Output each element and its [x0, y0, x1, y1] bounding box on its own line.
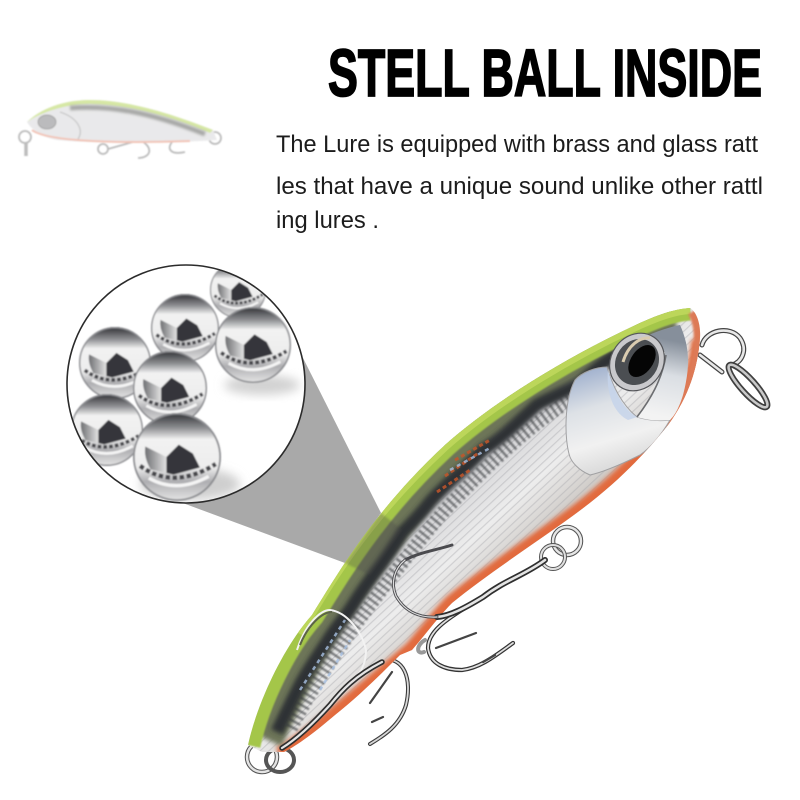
rear hook shank — [282, 662, 382, 748]
upper belly hook — [393, 545, 452, 617]
hook eye rings — [553, 527, 581, 555]
thumbnail body — [27, 100, 217, 143]
rear treble hook and rings (behind body) — [247, 659, 408, 772]
lure eye — [598, 323, 676, 401]
iris sheen — [623, 338, 650, 362]
rear hook curve — [370, 659, 408, 744]
gill edge — [637, 355, 666, 417]
belly hook shank — [437, 560, 545, 617]
magnifier cone — [180, 358, 381, 563]
eyelet — [700, 331, 744, 372]
description text: The Lure is equipped with brass and glass ratt — [276, 131, 758, 158]
snout shading — [664, 312, 698, 432]
thumbnail orange belly — [32, 130, 190, 142]
lens background — [67, 265, 305, 503]
front eyelet and split ring — [700, 331, 772, 411]
hooks over the body — [282, 545, 545, 748]
snout plate — [638, 325, 688, 420]
rear joint segment — [297, 610, 366, 683]
steel ball cluster — [71, 262, 300, 501]
silver base — [240, 300, 710, 760]
thumbnail green back — [27, 100, 213, 133]
iridescent flecks — [437, 440, 490, 492]
iridescent cheek — [608, 370, 637, 420]
light green highlight — [300, 310, 690, 634]
thumbnail gill — [60, 112, 80, 139]
rear rings — [247, 742, 277, 772]
gill plate — [566, 367, 670, 475]
thumbnail eye — [38, 115, 56, 129]
green back — [248, 308, 690, 745]
cone overlay on body — [345, 513, 396, 572]
serrated scales below band — [290, 400, 570, 730]
thumbnail dark back band — [70, 107, 205, 134]
thumbnail lure — [19, 100, 221, 158]
main lure body — [240, 300, 710, 760]
description text — [276, 131, 763, 234]
pupil — [623, 340, 661, 382]
iris — [606, 330, 668, 394]
third hook stub — [418, 640, 425, 653]
rear hook barbs — [370, 672, 392, 722]
magnifier lens: steel balls — [67, 262, 305, 503]
dark back band — [277, 345, 640, 732]
scale pattern — [240, 300, 710, 760]
lens rim — [67, 265, 305, 503]
split ring — [724, 361, 772, 411]
lower hook curve — [428, 605, 513, 670]
orange belly — [280, 340, 700, 755]
description text: ing lures . — [276, 207, 379, 234]
grey-green upper flank — [268, 320, 675, 740]
eye socket — [598, 323, 676, 401]
lower hook barbs — [436, 633, 495, 662]
description text: les that have a unique sound unlike other rattl — [276, 173, 763, 200]
belly treble hook (behind body) — [418, 527, 581, 670]
thumbnail rings and hooks — [19, 131, 221, 158]
